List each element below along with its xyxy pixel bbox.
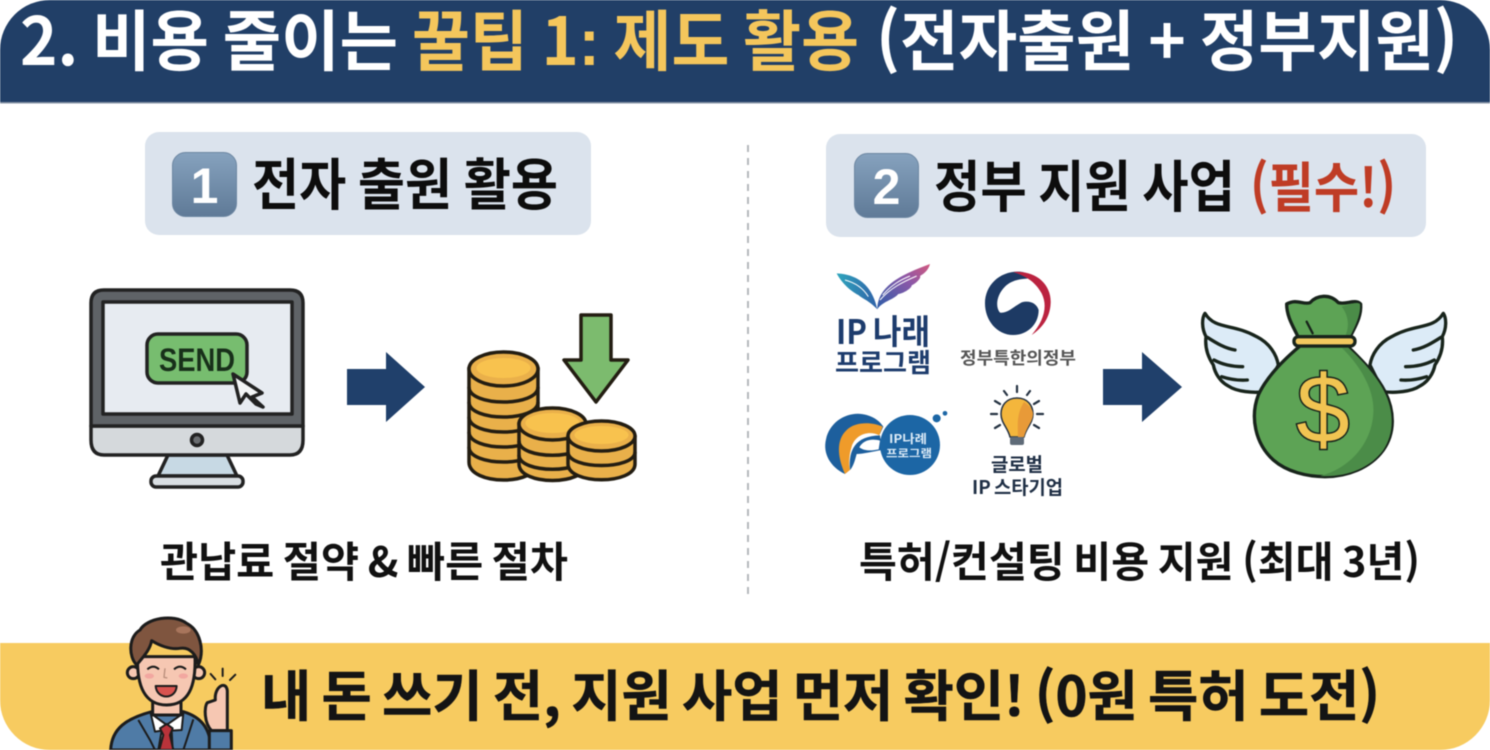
heading pill 2: 2 [873, 159, 900, 215]
logo: government emblem [960, 272, 1076, 369]
icon: flying money bag [1203, 296, 1446, 477]
logo: IP program circle: 프로그램 [886, 445, 932, 461]
heading pill 2: 정부 지원 사업 [934, 143, 1235, 224]
icon: flying money bag: $ [1296, 356, 1350, 463]
arrow [1103, 352, 1182, 422]
divider [747, 145, 749, 597]
logo: IP program wings: 프로그램 [835, 343, 931, 380]
icon: computer with send button [91, 290, 303, 487]
logo: global IP star [972, 386, 1063, 500]
heading pill 2: (필수!) [1250, 144, 1396, 223]
heading pill 1: 전자 출원 활용 [252, 141, 558, 222]
icon: coin stacks with down arrow [469, 315, 635, 480]
heading pill 1 [145, 132, 591, 235]
logo: IP program wings [835, 264, 931, 380]
logo: global IP star: 글로벌 [991, 450, 1043, 477]
header banner [0, 0, 1490, 104]
bottom banner [0, 643, 1490, 750]
title [22, 5, 1454, 75]
heading pill 2 [826, 134, 1426, 237]
logo: global IP star: IP 스타기업 [972, 473, 1063, 500]
panel: government support [825, 134, 1446, 590]
logo: IP program circle: IP나례 [889, 430, 927, 447]
logo: government emblem: 정부특한의정부 [960, 344, 1076, 369]
caption right: 특허/컨설팅 비용 지원 (최대 3년) [859, 529, 1420, 590]
panel: electronic filing [91, 132, 635, 590]
caption left: 관납료 절약 & 빠른 절차 [160, 529, 568, 590]
logo: IP program wings: IP 나래 [836, 305, 930, 354]
icon: smiling businessman with thumbs up [111, 618, 235, 750]
arrow [347, 352, 425, 422]
heading pill 1: 1 [191, 158, 218, 214]
icon: computer with send button: SEND [159, 342, 235, 378]
bottom message: 내 돈 쓰기 전, 지원 사업 먼저 확인! (0원 특허 도전) [261, 652, 1380, 732]
logo: IP program circle [825, 411, 947, 475]
